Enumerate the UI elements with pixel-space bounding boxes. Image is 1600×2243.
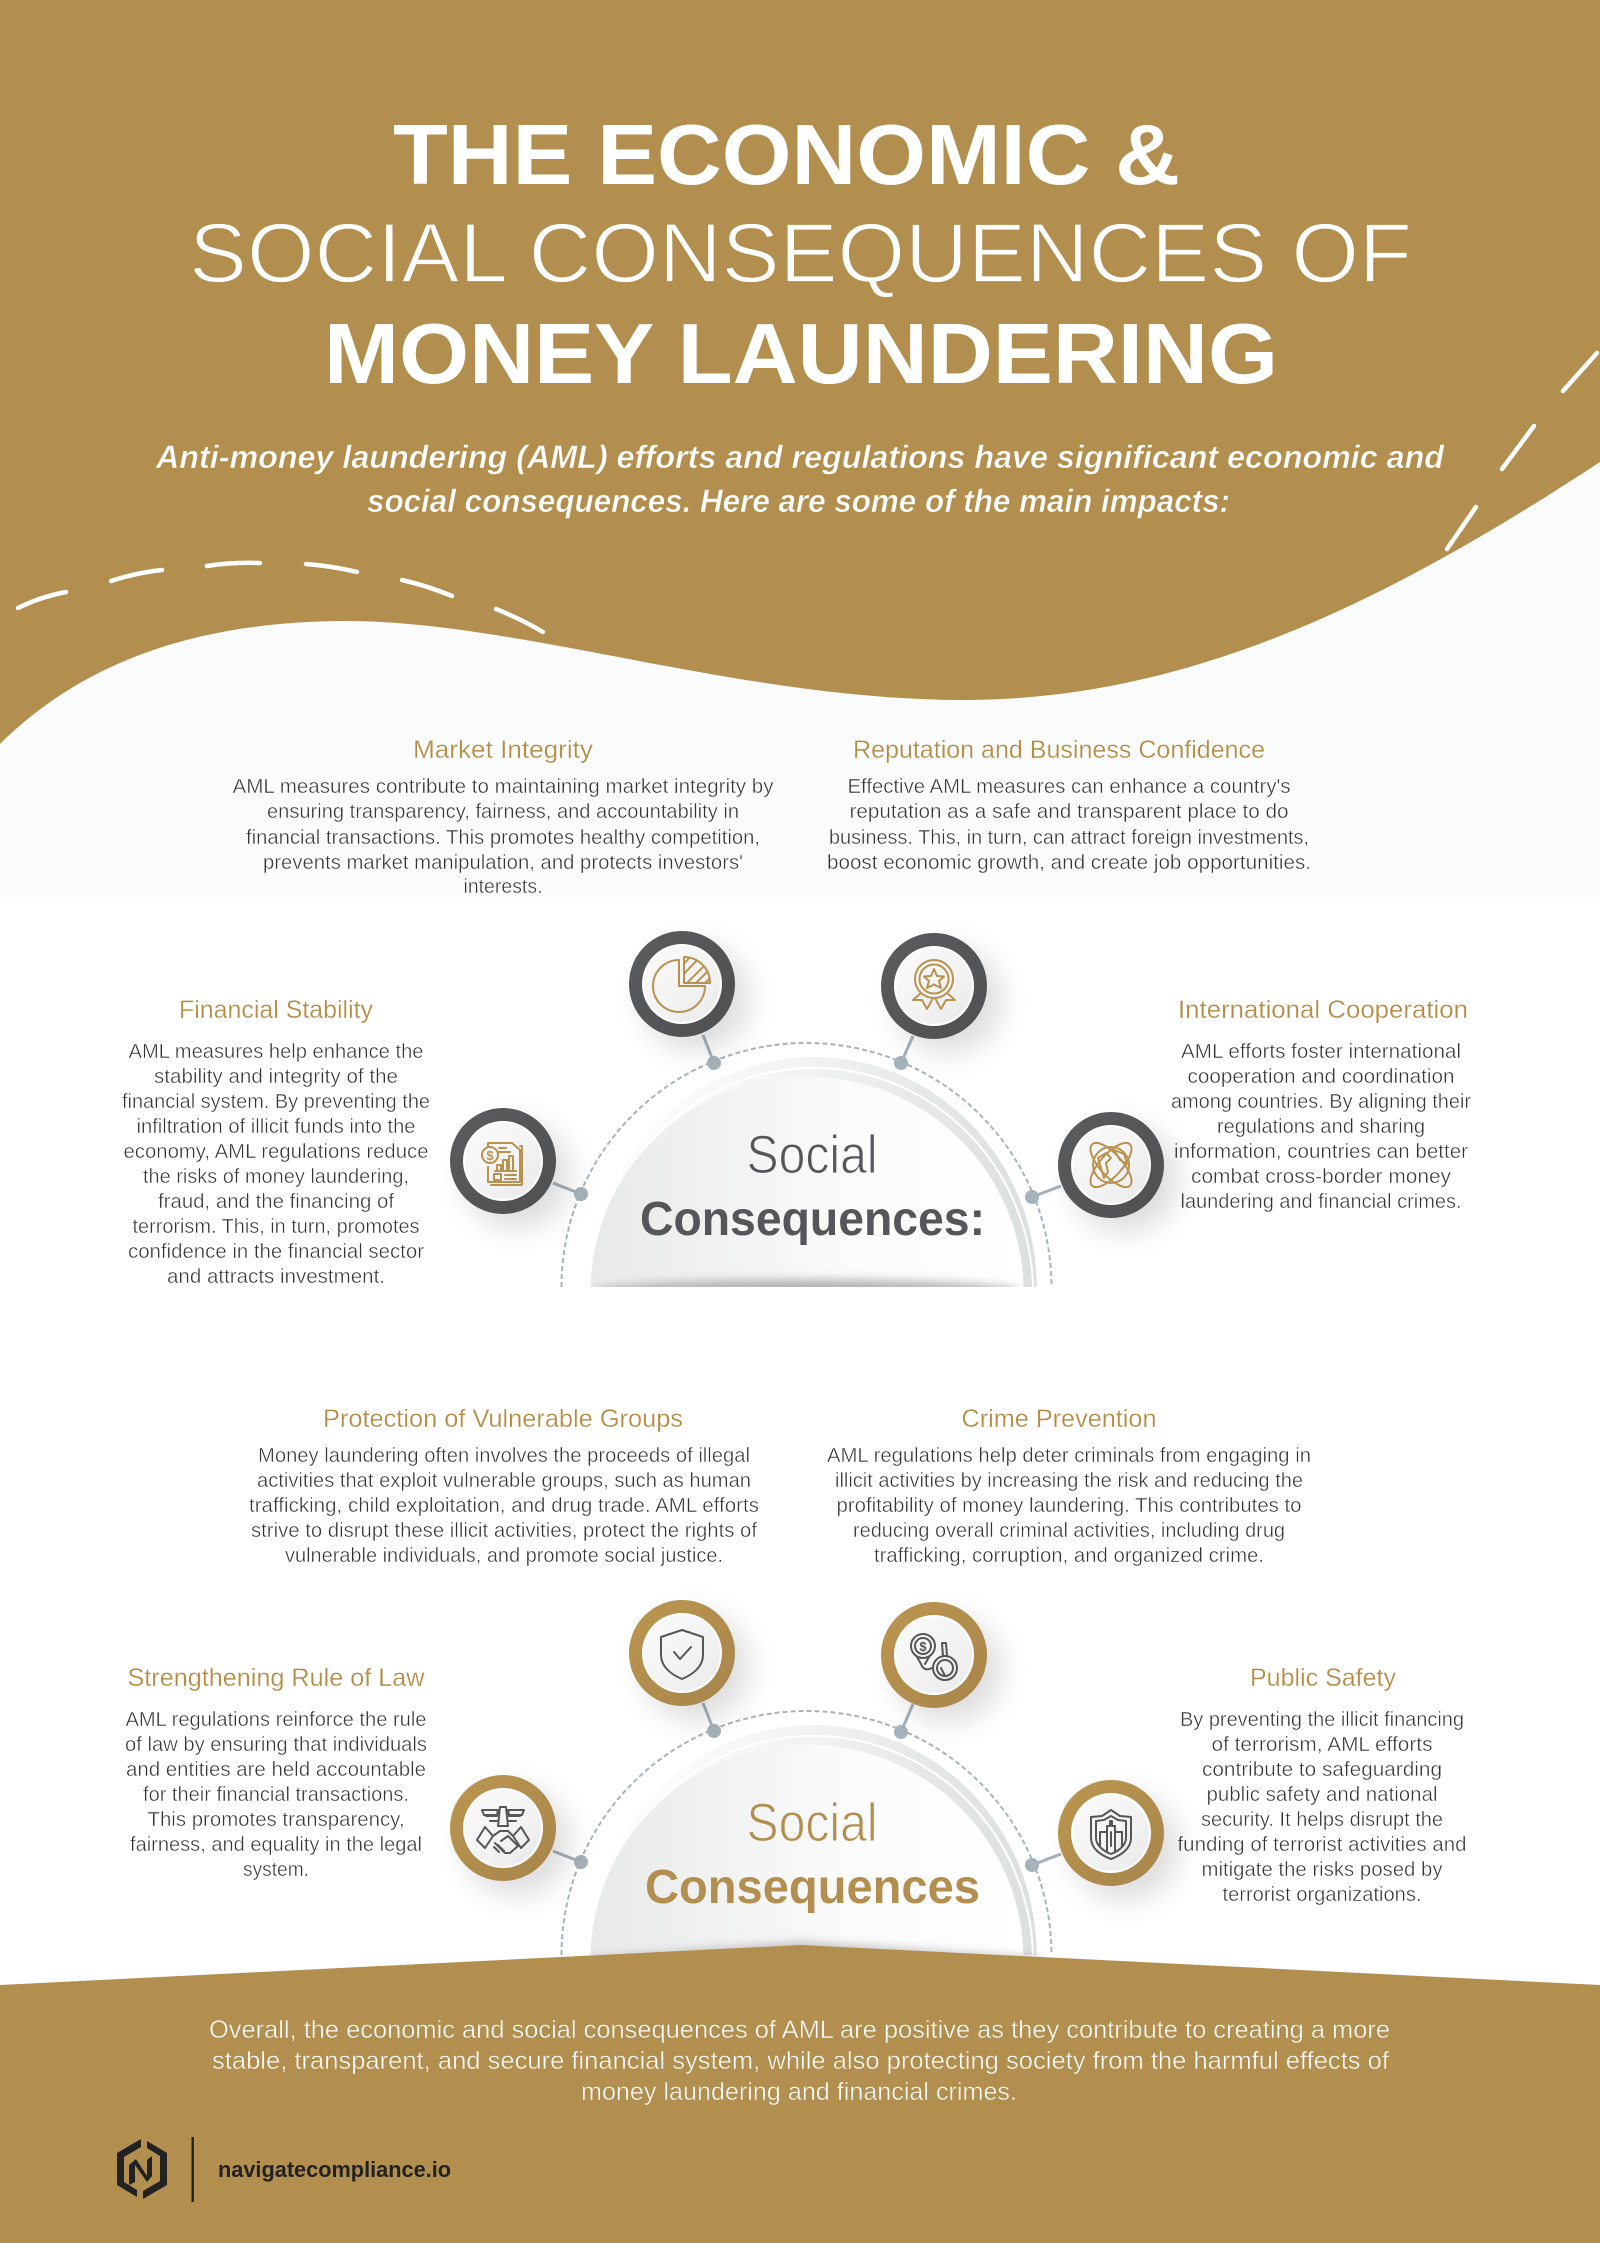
text block: Reputation and Business Confidence: business. This, in turn, can attract foreign investments, [829,827,1309,849]
icon: handshake with eagle [456,1782,571,1896]
dome label [640,1125,985,1246]
text block: Market Integrity: interests. [464,876,542,898]
text block: Financial Stability: stability and integrity of the [154,1066,398,1088]
text block: Strengthening Rule of Law: This promotes transparency, [148,1809,404,1831]
text block: Protection of Vulnerable Groups [249,1405,759,1567]
text block: Public Safety: Public Safety [1250,1664,1396,1692]
text block: Reputation and Business Confidence: reputation as a safe and transparent place to do [850,801,1288,823]
text block: Strengthening Rule of Law: system. [243,1859,309,1881]
text block: Market Integrity: prevents market manipulation, and protects investors' [263,852,743,874]
closing statement [209,2016,1390,2106]
decorative dashes: right trail [1447,353,1597,549]
light tinted band behind first text row [0,440,1600,897]
text block: Financial Stability: fraud, and the financing of [158,1191,394,1213]
text block: Financial Stability: economy, AML regulations reduce [124,1141,428,1163]
text block: Public Safety: terrorist organizations. [1222,1884,1422,1906]
text block: Public Safety: security. It helps disrupt the [1201,1809,1443,1831]
icon: money and handcuffs: $ [919,1639,927,1654]
text block: International Cooperation [1171,996,1471,1213]
text block: Public Safety: By preventing the illicit financing [1180,1709,1464,1731]
footer shadow [590,1942,1040,1966]
icon: financial report: $ [486,1148,494,1163]
closing statement: Overall, the economic and social consequences of AML are positive as they contribute to creating a more [209,2016,1390,2044]
text block: Crime Prevention: trafficking, corruption, and organized crime. [874,1545,1264,1567]
text block: Protection of Vulnerable Groups: activities that exploit vulnerable groups, such as human [257,1470,751,1492]
text block: Financial Stability: infiltration of illicit funds into the [136,1116,416,1138]
header wave shape [0,0,1600,744]
text block: International Cooperation: cooperation and coordination [1188,1066,1454,1088]
icon: hexagon mark [117,2139,167,2199]
text block: Financial Stability: Financial Stability [179,996,373,1024]
icon: pie chart [636,938,750,1052]
text block: Protection of Vulnerable Groups: strive to disrupt these illicit activities, protect the rights of [251,1520,757,1542]
text block: Financial Stability: and attracts investment. [167,1266,385,1288]
text block: Crime Prevention: illicit activities by increasing the risk and reducing the [835,1470,1303,1492]
text block: Protection of Vulnerable Groups: vulnerable individuals, and promote social justice. [285,1545,723,1567]
title [189,108,1412,402]
text block: Strengthening Rule of Law [125,1664,427,1881]
text block: Crime Prevention: Crime Prevention [962,1405,1156,1433]
icon: shield with city [1064,1786,1179,1901]
text block: Strengthening Rule of Law: AML regulations reinforce the rule [126,1709,426,1731]
decorative dashes: left trail [18,563,543,632]
text block: Protection of Vulnerable Groups: Money laundering often involves the proceeds of illegal [258,1445,750,1467]
dome [591,1725,1037,1955]
text block: International Cooperation: laundering and financial crimes. [1180,1191,1462,1213]
dashed arc [562,1711,1052,1955]
text block: International Cooperation: information, countries can better [1174,1141,1468,1163]
text block: Market Integrity: ensuring transparency, fairness, and accountability in [267,801,739,823]
text block: Financial Stability: the risks of money laundering, [143,1166,409,1188]
text block: Strengthening Rule of Law: Strengthening Rule of Law [128,1664,425,1692]
text block: Protection of Vulnerable Groups: Protection of Vulnerable Groups [323,1405,683,1433]
title: THE ECONOMIC & [393,108,1180,203]
dome label [645,1793,980,1914]
text block: Reputation and Business Confidence: boost economic growth, and create job opportunities. [827,852,1311,874]
text block: Financial Stability: confidence in the financial sector [128,1241,424,1263]
dome label: Social [746,1793,878,1853]
text block: Market Integrity [232,736,774,898]
text block: Reputation and Business Confidence: Reputation and Business Confidence [853,736,1265,764]
title: MONEY LAUNDERING [324,307,1278,402]
icon: money and handcuffs [888,1608,1002,1723]
dashed arc [562,1043,1052,1287]
dome [591,1057,1037,1304]
footer band [0,1945,1600,2243]
text block: Strengthening Rule of Law: and entities are held accountable [126,1759,426,1781]
text block: Protection of Vulnerable Groups: trafficking, child exploitation, and drug trade. AML efforts [249,1495,759,1517]
text block: Public Safety: public safety and national [1206,1784,1438,1806]
text block: International Cooperation: among countries. By aligning their [1171,1091,1471,1113]
divider [192,2137,194,2202]
closing statement: stable, transparent, and secure financial system, while also protecting society from the harmful effects of [212,2047,1389,2075]
closing statement: money laundering and financial crimes. [581,2078,1017,2106]
text block: Strengthening Rule of Law: fairness, and equality in the legal [130,1834,422,1856]
diagram: economic dome with icons [456,938,1179,1304]
diagram: social dome with icons [456,1606,1179,1955]
title: SOCIAL CONSEQUENCES OF [189,206,1412,300]
text block: Strengthening Rule of Law: for their financial transactions. [143,1784,409,1806]
text block: Public Safety: of terrorism, AML efforts [1212,1734,1432,1756]
connectors [553,1035,1061,1204]
text block: Reputation and Business Confidence: Effective AML measures can enhance a country's [848,776,1290,798]
text block: Crime Prevention: profitability of money laundering. This contributes to [836,1495,1302,1517]
text block: Crime Prevention [827,1405,1311,1567]
connectors [553,1703,1061,1872]
text block: Financial Stability: AML measures help enhance the [128,1041,424,1063]
text block: Crime Prevention: AML regulations help deter criminals from engaging in [827,1445,1311,1467]
text block: Market Integrity: financial transactions. This promotes healthy competition, [246,827,760,849]
text block: Crime Prevention: reducing overall criminal activities, including drug [853,1520,1285,1542]
text block: Market Integrity: AML measures contribute to maintaining market integrity by [232,776,774,798]
text block: International Cooperation: International Cooperation [1178,996,1468,1024]
subtitle: social consequences. Here are some of the main impacts: [367,483,1230,519]
subtitle [155,439,1445,519]
icon: financial report [456,1114,571,1229]
subtitle: Anti-money laundering (AML) efforts and regulations have significant economic and [155,439,1445,475]
text block: Financial Stability [122,996,430,1288]
website name: navigatecompliance.io [218,2157,451,2182]
text block: International Cooperation: AML efforts foster international [1181,1041,1461,1063]
text block: Strengthening Rule of Law: of law by ensuring that individuals [125,1734,427,1756]
text block: Public Safety: funding of terrorist activities and [1178,1834,1466,1856]
text block: International Cooperation: combat cross-border money [1191,1166,1451,1188]
text block: Public Safety: contribute to safeguarding [1202,1759,1442,1781]
text block: Financial Stability: terrorism. This, in turn, promotes [132,1216,420,1238]
text block: Financial Stability: financial system. By preventing the [122,1091,430,1113]
dome label: Consequences: [640,1193,985,1246]
text block: Market Integrity: Market Integrity [413,736,594,764]
text block: International Cooperation: regulations and sharing [1217,1116,1425,1138]
icon: award ribbon [888,940,1002,1054]
text block: Public Safety: mitigate the risks posed by [1202,1859,1442,1881]
text block: Public Safety [1178,1664,1466,1906]
dome label: Social [746,1125,878,1185]
icon: shield check [636,1606,750,1721]
text block: Reputation and Business Confidence [827,736,1311,874]
icon: globe [1064,1118,1179,1233]
dome label: Consequences [645,1861,980,1914]
logo [117,2137,451,2202]
